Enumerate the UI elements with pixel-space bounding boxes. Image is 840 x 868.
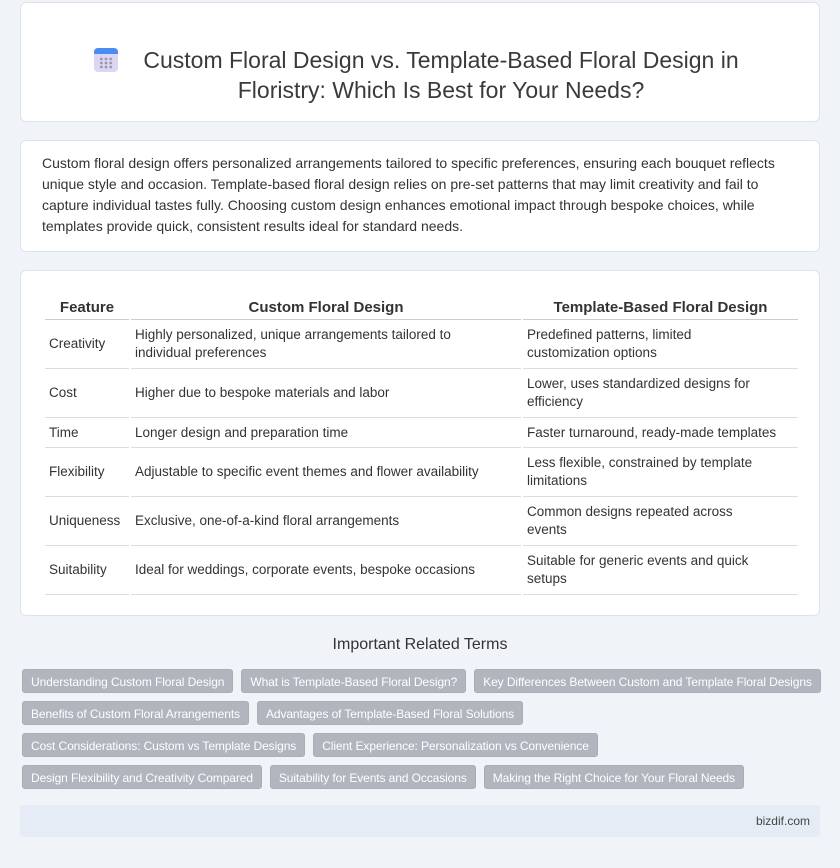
comparison table: Custom Floral Design: [248, 298, 404, 316]
comparison table: Faster turnaround, ready-made templates: [527, 424, 776, 440]
comparison table: Higher due to bespoke materials and labor: [135, 385, 389, 400]
related term tags: Advantages of Template-Based Floral Solutions: [266, 707, 514, 721]
description text: Custom floral design offers personalized arrangements tailored to specific preferences, ensuring each bouquet reflects unique style and occasion. Template-based floral design relies on pre-set patterns that may limit creativity and fail to capture individual tastes fully. Choosing custom design enhances emotional impact through bespoke choices, while templates provide quick, consistent results ideal for standard needs.: [42, 155, 775, 234]
comparison table: [45, 298, 798, 595]
related term tags: What is Template-Based Floral Design?: [250, 675, 457, 689]
comparison table: Highly personalized, unique arrangements tailored to individual preferences: [135, 327, 451, 360]
title: Custom Floral Design vs. Template-Based Floral Design in Floristry: Which Is Best for Your Needs?: [143, 47, 739, 103]
comparison table: Adjustable to specific event themes and flower availability: [135, 464, 479, 479]
related term tags: [22, 669, 821, 789]
comparison table: Flexibility: [49, 464, 105, 479]
comparison table: Time: [49, 424, 78, 440]
related term tags: Client Experience: Personalization vs Convenience: [322, 739, 589, 753]
related term tags: Benefits of Custom Floral Arrangements: [31, 707, 240, 721]
related term tags: Suitability for Events and Occasions: [279, 771, 467, 785]
header card: [20, 2, 820, 122]
comparison table: Predefined patterns, limited customization options: [527, 327, 691, 360]
comparison table: Exclusive, one-of-a-kind floral arrangements: [135, 513, 399, 528]
related term tags: Cost Considerations: Custom vs Template Designs: [31, 739, 296, 753]
footer: [20, 805, 820, 837]
icon: calendar: [94, 48, 118, 72]
related term tags: Key Differences Between Custom and Template Floral Designs: [483, 675, 812, 689]
comparison table: Lower, uses standardized designs for efficiency: [527, 376, 750, 409]
comparison table card: [20, 270, 820, 616]
comparison table: Ideal for weddings, corporate events, bespoke occasions: [135, 562, 475, 577]
comparison table: Suitability: [49, 562, 107, 577]
comparison table: Longer design and preparation time: [135, 424, 348, 440]
related terms heading: Important Related Terms: [333, 636, 507, 653]
comparison table: Template-Based Floral Design: [554, 298, 767, 316]
comparison table: Less flexible, constrained by template limitations: [527, 455, 752, 488]
comparison table: Cost: [49, 385, 77, 400]
related term tags: Making the Right Choice for Your Floral Needs: [493, 771, 735, 785]
description card: [20, 140, 820, 252]
related term tags: Design Flexibility and Creativity Compared: [31, 771, 253, 785]
comparison table: Uniqueness: [49, 513, 120, 528]
related term tags: Understanding Custom Floral Design: [31, 675, 224, 689]
footer: bizdif.com: [756, 814, 810, 828]
comparison table: Common designs repeated across events: [527, 504, 733, 537]
comparison table: Suitable for generic events and quick setups: [527, 553, 748, 586]
comparison table: Creativity: [49, 336, 105, 351]
comparison table: Feature: [60, 298, 114, 316]
